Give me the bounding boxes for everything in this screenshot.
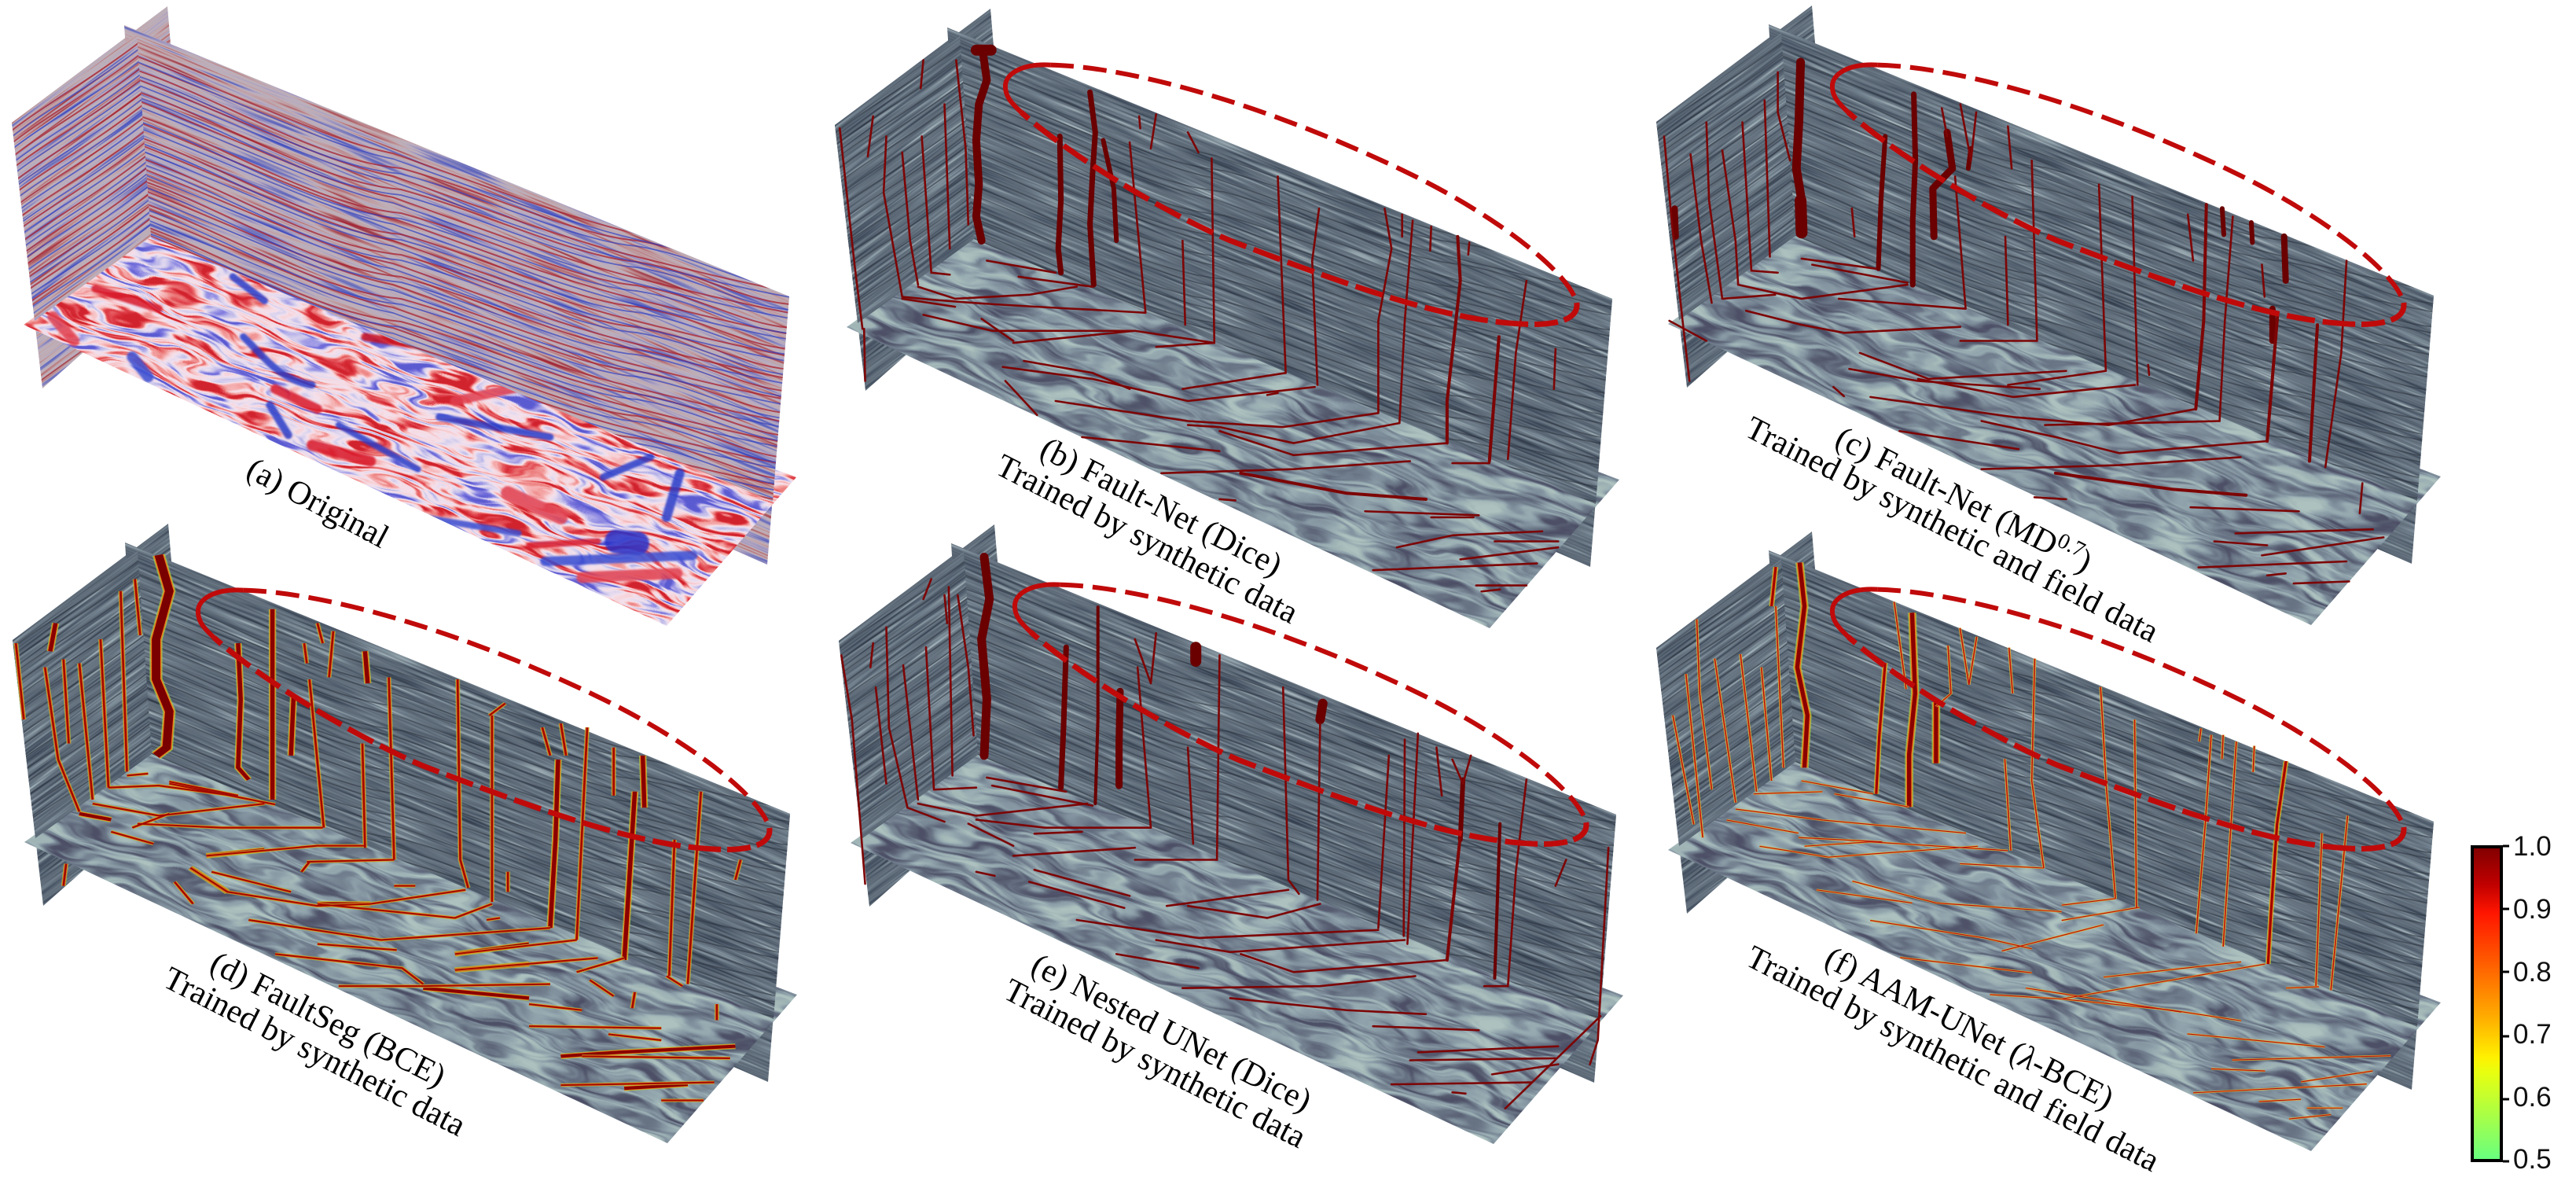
- tick labels: 1.0: [2513, 831, 2552, 862]
- caption e: Trained by synthetic data: [998, 972, 1312, 1156]
- dashed ellipse c: [1832, 64, 2404, 324]
- dashed ellipse e: [1015, 584, 1586, 844]
- seismic volume in red-white-blue colour map: [12, 6, 796, 626]
- tick marks: [2503, 846, 2509, 1161]
- tick labels: 0.5: [2513, 1144, 2552, 1175]
- tick labels: 0.7: [2513, 1019, 2552, 1050]
- seismic volume d: [0, 488, 913, 1169]
- panel f: AAM-UNet lambda-BCE: [1567, 496, 2556, 1179]
- caption c: 0.7: [2053, 528, 2089, 563]
- caption b: (b) Fault-Net (Dice): [1034, 431, 1288, 583]
- fault probability traces c: [1664, 62, 2383, 583]
- colour bar legend: [2472, 831, 2552, 1175]
- caption c: (c) Fault-Net (MD: [1830, 420, 2063, 563]
- caption e: (e) Nested UNet (Dice): [1025, 947, 1317, 1120]
- caption d: Trained by synthetic data: [158, 960, 472, 1144]
- caption c: Trained by synthetic and field data: [1740, 410, 2164, 650]
- dashed ellipse f: [1832, 589, 2404, 848]
- fault probability traces b: [840, 50, 1558, 591]
- dashed ellipse d: [198, 590, 770, 849]
- tick labels: 0.6: [2513, 1082, 2552, 1113]
- fault probability traces e: [841, 557, 1608, 1109]
- tick labels: 0.9: [2513, 894, 2552, 925]
- caption a: (a) Original: [241, 451, 395, 556]
- seismic volume e: [750, 489, 1739, 1170]
- panel e: Nested UNet Dice: [750, 489, 1739, 1170]
- fault probability traces f: [1673, 563, 2390, 1119]
- caption f: Trained by synthetic and field data: [1740, 939, 2165, 1179]
- caption f: (f) AAM-UNet (λ-BCE): [1819, 940, 2119, 1117]
- caption b: Trained by synthetic data: [990, 447, 1304, 631]
- panel a: original seismic volume: [12, 6, 796, 626]
- seismic volume b: [746, 0, 1735, 654]
- panel c: Fault-Net MD0.7: [1567, 0, 2556, 651]
- dashed ellipse b: [1005, 64, 1577, 324]
- tick labels: [2513, 831, 2552, 1175]
- colour ramp: [2472, 847, 2501, 1161]
- tick labels: 0.8: [2513, 957, 2552, 988]
- panel b: Fault-Net Dice: [746, 0, 1735, 654]
- seismic volume c: [1567, 0, 2556, 651]
- fault probability traces d: [16, 555, 740, 1101]
- caption c: ): [2071, 543, 2097, 580]
- caption d: (d) FaultSeg (BCE): [204, 945, 451, 1094]
- panel d: FaultSeg BCE: [0, 488, 913, 1169]
- seismic volume f: [1567, 496, 2556, 1177]
